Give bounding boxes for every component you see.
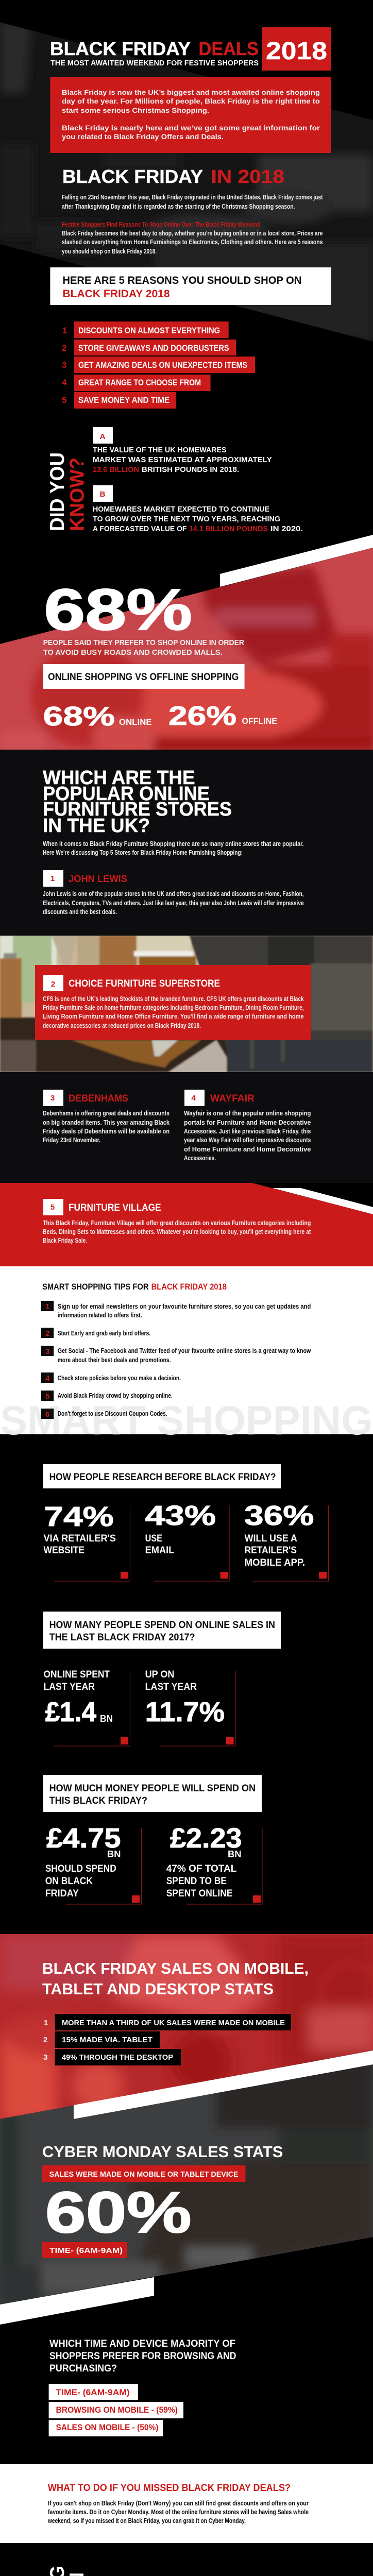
panel: store 5 Furniture Village: Black Friday Sale. (43, 1237, 87, 1244)
tip 4 (41, 1372, 181, 1383)
list: device stats: 15% MADE VIA. TABLET (62, 2036, 152, 2044)
heading box: how people research (43, 1464, 281, 1488)
tip 1: Sign up for email newsletters on your favourite furniture stores, so you can get updates and (58, 1303, 311, 1310)
list: five reasons: 1 (62, 326, 67, 335)
stat card: £4.75 BN: FRIDAY (45, 1888, 79, 1899)
panel: cyber monday dark photo (0, 2050, 373, 2308)
store 2: Choice Furniture Superstore: decorative accessories at reduced prices on Black Friday 2018. (43, 1022, 201, 1029)
list: five reasons: GET AMAZING DEALS ON UNEXPECTED ITEMS (78, 360, 247, 370)
store 2: Choice Furniture Superstore: CHOICE FURNITURE SUPERSTORE (69, 978, 220, 989)
list: device stats: 2 (43, 2036, 47, 2044)
list: preference labels (49, 2384, 183, 2436)
panel: missed deals (0, 2464, 373, 2543)
stat card: 36%: 36% (244, 1500, 314, 1531)
stat card: £2.23 BN: 47% OF TOTAL (166, 1863, 237, 1874)
text block: stores intro (43, 840, 304, 856)
subtitle: THE MOST AWAITED WEEKEND FOR FESTIVE SHOPPERS (50, 59, 259, 67)
decorative white strip lower (0, 2277, 154, 2325)
list: five reasons: SAVE MONEY AND TIME (78, 395, 169, 405)
fact B: HOMEWARES MARKET EXPECTED TO CONTINUE (93, 505, 269, 514)
panel: reasons heading: BLACK FRIDAY 2018 (62, 288, 170, 300)
stat card: 11.7%: UP ON (145, 1669, 174, 1680)
tip 1: 1 (45, 1302, 49, 1311)
panel: online shopping red photo (0, 541, 373, 757)
tip 3 (41, 1346, 311, 1364)
panel: reasons heading: HERE ARE 5 REASONS YOU SHOULD SHOP ON (62, 275, 301, 286)
stat card: 43%: USE (145, 1533, 162, 1544)
store 2: Choice Furniture Superstore: Living Room Furniture and Home Office Furniture. You'll find a wide range of furniture and home (43, 1013, 304, 1020)
stat: online 68%: ONLINE (119, 717, 152, 727)
list: five reasons: 2 (62, 343, 66, 353)
fact A: THE VALUE OF THE UK HOMEWARES (93, 446, 227, 454)
heading: Black Friday in 2018 (62, 166, 284, 187)
heading: Black Friday in 2018: BLACK FRIDAY (62, 166, 203, 187)
stat: online 68% (43, 702, 152, 732)
tip 3: more about their best deals and promotions. (58, 1357, 171, 1364)
store 4: Wayfair (184, 1090, 311, 1162)
tip 1: information related to offers first. (58, 1312, 142, 1319)
store 3: Debenhams: DEBENHAMS (69, 1093, 128, 1104)
fact B: IN 2020. (270, 524, 303, 533)
heading: mobile sales (42, 1959, 309, 1998)
store 1: John Lewis (43, 870, 304, 916)
store 1: John Lewis: discounts and the best deals. (43, 908, 117, 916)
stat card: £4.75 BN: ON BLACK (45, 1876, 93, 1887)
store 4: Wayfair: Wayfair is one of the popular online shopping (184, 1110, 311, 1117)
heading box: how much money: THIS BLACK FRIDAY? (49, 1795, 147, 1806)
tip 2 (41, 1328, 150, 1338)
panel: reasons heading (50, 267, 331, 305)
panel: online vs offline heading: ONLINE SHOPPING VS OFFLINE SHOPPING (48, 672, 239, 683)
year badge: 2018 (266, 38, 327, 65)
fact B: B (100, 490, 106, 499)
text block: stores intro: Here We're discussing Top 5 Stores for Black Friday Home Furnishing Shopping: (43, 849, 243, 856)
heading: popular stores: FURNITURE STORES (43, 799, 232, 820)
store 2: Choice Furniture Superstore: Friday Furniture Sale on home furniture categories including Bedroom Furniture, Dining Room Furniture, (43, 1004, 304, 1011)
panel: mobile sales red photo (0, 1934, 373, 2125)
heading box: how many people spend: HOW MANY PEOPLE SPEND ON ONLINE SALES IN (49, 1620, 275, 1631)
panel: store 5 Furniture Village: Beds, Dining Sets to Mattresses and others. Whatever you're looking to buy, you'll get everything here at (43, 1228, 311, 1235)
stat card: 74%: 74% (44, 1501, 114, 1532)
label bar: time (42, 2242, 127, 2258)
heading: did you know, vertical: DID YOU (46, 452, 69, 531)
fact B: TO GROW OVER THE NEXT TWO YEARS, REACHING (93, 515, 280, 523)
panel: store 5 Furniture Village: FURNITURE VILLAGE (69, 1202, 161, 1213)
list: preference labels: TIME- (6AM-9AM) (56, 2387, 130, 2397)
stat card: 36%: MOBILE APP. (245, 1557, 305, 1568)
watermark: smart shopping: SMART SHOPPING (0, 1397, 373, 1443)
heading box: how much money: HOW MUCH MONEY PEOPLE WILL SPEND ON (49, 1783, 256, 1794)
stat card: 36%: RETAILER'S (245, 1545, 297, 1556)
store 4: Wayfair: year also Way Fair will offer impressive discounts (184, 1137, 311, 1144)
text block: about Black Friday: Black Friday becomes the best day to shop, whether you're buying online or in a local store, Prices are (62, 230, 323, 237)
stat card: 36% (244, 1500, 329, 1581)
heading box: how people research: HOW PEOPLE RESEARCH BEFORE BLACK FRIDAY? (49, 1472, 276, 1483)
list: five reasons: GREAT RANGE TO CHOOSE FROM (78, 378, 201, 387)
store 3: Debenhams (43, 1090, 169, 1144)
stat: 68%: 68% (44, 577, 192, 642)
panel: intro: day of the year. For Millions of people, Black Friday is the right time to (62, 97, 320, 105)
panel: missed deals: favourite items. Do it on Cyber Monday. Most of the online furniture stores will be having Sales whole (48, 2509, 309, 2516)
tip 3: Get Social - The Facebook and Twitter feed of your favourite online stores is a great way to know (58, 1347, 311, 1354)
heading: which time and device (49, 2338, 236, 2374)
decorative white strips (74, 2050, 373, 2119)
decorative white strip (220, 535, 373, 587)
text block: about Black Friday: slashed on everything from Home Furnishings to Electronics, Clothing and others. Here are 5 reasons (62, 239, 323, 246)
fact B: 14.1 BILLION POUNDS (189, 524, 268, 533)
heading: did you know, vertical (46, 452, 89, 531)
list: device stats: 1 (44, 2019, 48, 2027)
store 3: Debenhams: Friday deals of Debenhams will be available on (43, 1128, 169, 1135)
title: DEALS (199, 38, 259, 59)
stat card: £2.23 BN: £2.23 (170, 1823, 242, 1854)
stat card: 74% (43, 1501, 130, 1581)
list: preference labels: BROWSING ON MOBILE - (59%) (56, 2405, 178, 2415)
store 2: Choice Furniture Superstore (35, 965, 311, 1040)
store 2: Choice Furniture Superstore: CFS is one of the UK's leading Stockists of the branded furniture. CFS UK offers great discounts at Black (43, 995, 304, 1003)
stat card: 74%: VIA RETAILER'S (43, 1533, 116, 1544)
label bar: time: TIME- (6AM-9AM) (49, 2246, 123, 2255)
store 4: Wayfair: Accessories. (184, 1155, 216, 1162)
stat card: 43% (145, 1500, 229, 1581)
heading box: how many people spend: THE LAST BLACK FRIDAY 2017? (49, 1632, 195, 1643)
heading: popular stores: IN THE UK? (43, 815, 150, 837)
tip 5: Avoid Black Friday crowd by shopping online. (58, 1392, 173, 1399)
store 3: Debenhams: Friday 23rd November. (43, 1137, 100, 1144)
stat card: 43%: EMAIL (145, 1545, 175, 1556)
store 2: Choice Furniture Superstore: 2 (51, 980, 55, 989)
heading: popular stores: POPULAR ONLINE (43, 783, 210, 805)
stat card: £4.75 BN: BN (107, 1849, 121, 1859)
tip 3: 3 (45, 1347, 49, 1356)
store 4: Wayfair: WAYFAIR (210, 1093, 255, 1104)
fact A: BRITISH POUNDS IN 2018. (142, 465, 239, 474)
panel: intro (50, 77, 331, 153)
stat card: 11.7%: LAST YEAR (145, 1682, 197, 1692)
heading box: how many people spend (43, 1612, 281, 1649)
label bar: mobile or tablet: SALES WERE MADE ON MOBILE OR TABLET DEVICE (49, 2170, 239, 2179)
store 1: John Lewis: Electricals, Computers, TVs and others. Just like last year, this year also John Lewis will offer impressive (43, 900, 304, 907)
tip 5: 5 (45, 1392, 49, 1401)
year badge (262, 27, 331, 71)
list: five reasons: 3 (62, 360, 66, 370)
list: preference labels: SALES ON MOBILE - (50%) (56, 2422, 159, 2432)
text block: stores intro: When it comes to Black Friday Furniture Shopping there are so many online stores that are popular. (43, 840, 304, 848)
panel: store 5 Furniture Village (0, 1183, 373, 1266)
text block: prefer online: PEOPLE SAID THEY PREFER TO SHOP ONLINE IN ORDER (43, 638, 244, 647)
panel: store 5 Furniture Village: 5 (50, 1203, 55, 1212)
stat card: £2.23 BN (166, 1823, 262, 1904)
fact A (93, 427, 272, 474)
stat card: £4.75 BN (45, 1823, 142, 1904)
panel: intro: Black Friday is nearly here and we’ve got some great information for (62, 124, 320, 132)
stat card: 74%: WEBSITE (43, 1545, 84, 1556)
stat card: £4.75 BN: SHOULD SPEND (45, 1863, 116, 1874)
panel: intro: start some serious Christmas Shopping. (62, 106, 209, 114)
store 1: John Lewis: John Lewis is one of the popular stores in the UK and offers great deals and discounts on Home, Fashion, (43, 890, 304, 897)
stat: offline 26% (168, 701, 277, 731)
stat card: 11.7%: 11.7% (145, 1697, 225, 1727)
list: five reasons: STORE GIVEAWAYS AND DOORBUSTERS (78, 343, 229, 353)
stat card: £1.4 BN: £1.4 (45, 1697, 96, 1727)
heading: Black Friday in 2018: IN 2018 (211, 166, 284, 187)
stat card: 36%: WILL USE A (245, 1533, 297, 1544)
panel: intro: Black Friday is now the UK’s biggest and most awaited online shopping (62, 88, 320, 96)
tip 4: 4 (45, 1374, 50, 1383)
text block: prefer online (43, 638, 244, 657)
list: device stats (43, 2014, 291, 2065)
tip 2: 2 (45, 1329, 49, 1338)
panel: bedroom photo band (0, 936, 373, 1072)
store 4: Wayfair: 4 (191, 1094, 196, 1103)
stat card: £1.4 BN (43, 1669, 130, 1746)
heading: did you know, vertical: KNOW? (66, 457, 89, 531)
heading box: how much money (43, 1775, 262, 1812)
stat: offline 26%: OFFLINE (242, 716, 277, 726)
store 1: John Lewis: JOHN LEWIS (69, 874, 127, 885)
stat card: £4.75 BN: £4.75 (46, 1823, 121, 1854)
title (50, 38, 259, 59)
heading: smart shopping tips (42, 1282, 227, 1292)
text block: prefer online: TO AVOID BUSY ROADS AND CROWDED MALLS. (43, 648, 223, 657)
fact B (93, 485, 303, 533)
store 1: John Lewis: 1 (50, 874, 55, 883)
stat card: 11.7% (145, 1669, 235, 1746)
store 3: Debenhams: Debenhams is offering great deals and discounts (43, 1110, 169, 1117)
panel: store 5 Furniture Village: This Black Friday, Furniture Village will offer great discounts on various Furniture categories including (43, 1219, 311, 1227)
stat card: £2.23 BN: SPEND TO BE (166, 1876, 227, 1887)
heading: smart shopping tips: BLACK FRIDAY 2018 (151, 1282, 227, 1292)
heading: mobile sales: TABLET AND DESKTOP STATS (42, 1980, 274, 1998)
panel: online vs offline heading (43, 664, 245, 689)
heading: which time and device: PURCHASING? (49, 2363, 117, 2374)
stat card: £1.4 BN: ONLINE SPENT (43, 1669, 110, 1680)
heading: cyber monday: CYBER MONDAY SALES STATS (42, 2143, 283, 2161)
tip 4: Check store policies before you make a decision. (58, 1375, 181, 1382)
heading: mobile sales: BLACK FRIDAY SALES ON MOBILE, (42, 1959, 309, 1977)
stat: online 68%: 68% (43, 702, 115, 732)
store 3: Debenhams: 3 (50, 1094, 55, 1103)
tip 6 (41, 1409, 167, 1419)
stat card: £2.23 BN: SPENT ONLINE (166, 1888, 233, 1899)
text block: about Black Friday (62, 194, 323, 255)
panel: intro: you related to Black Friday Offers and Deals. (62, 132, 224, 141)
stat card: 43%: 43% (145, 1500, 216, 1531)
panel: furniture stores background (0, 750, 373, 1183)
heading: looking for even more deals, vertical (46, 2566, 128, 2576)
text block: about Black Friday: Festive Shoppers Find Reasons To Shop Online Over The Black Friday Weekend (62, 221, 261, 228)
list: device stats: MORE THAN A THIRD OF UK SALES WERE MADE ON MOBILE (62, 2019, 285, 2027)
fact A: 13.6 BILLION (93, 465, 139, 474)
stat card: £2.23 BN: BN (228, 1849, 242, 1859)
store 4: Wayfair: Accessories. Just like previous Black Friday, this (184, 1128, 311, 1135)
tip 2: Start Early and grab early bird offers. (58, 1330, 150, 1337)
list: five reasons: 5 (62, 395, 66, 405)
stat card: £1.4 BN: BN (100, 1714, 113, 1724)
label bar: mobile or tablet (42, 2165, 245, 2182)
tip 6: Don't forget to use Discount Coupon Codes. (58, 1410, 167, 1417)
panel: smart shopping tips (0, 1266, 373, 1434)
list: device stats: 49% THROUGH THE DESKTOP (62, 2053, 173, 2062)
panel: missed deals: weekend, so if you missed it on Black Friday, you can grab it on Cyber Monday. (47, 2517, 246, 2524)
decorative white strip (273, 1188, 373, 1214)
title: BLACK FRIDAY (50, 38, 191, 59)
text block: about Black Friday: you should shop on Black Friday 2018. (62, 248, 157, 255)
panel: hero bedroom photo (0, 22, 373, 342)
fact A: MARKET WAS ESTIMATED AT APPROXIMATELY (93, 455, 272, 464)
text block: about Black Friday: after Thanksgiving Day and it is regarded as the starting of the Christmas Shopping season. (62, 203, 295, 210)
store 3: Debenhams: on big branded items. This year amazing Black (43, 1119, 169, 1126)
heading: popular stores (43, 767, 232, 837)
heading: which time and device: SHOPPERS PREFER FOR BROWSING AND (49, 2351, 236, 2362)
heading: popular stores: WHICH ARE THE (43, 767, 195, 789)
stat: 60%: 60% (45, 2180, 192, 2245)
stat card: £1.4 BN: LAST YEAR (43, 1682, 95, 1692)
heading: which time and device: WHICH TIME AND DEVICE MAJORITY OF (49, 2338, 235, 2349)
fact B: A FORECASTED VALUE OF (93, 524, 186, 533)
store 4: Wayfair: of Home Furniture and Home Decorative (184, 1146, 311, 1153)
list: five reasons: 4 (62, 378, 67, 387)
heading: smart shopping tips: SMART SHOPPING TIPS FOR (42, 1282, 148, 1292)
panel: missed deals: WHAT TO DO IF YOU MISSED BLACK FRIDAY DEALS? (48, 2483, 291, 2494)
panel: missed deals: If you can't shop on Black Friday (Don't Worry) you can still find great discounts and offers on your (48, 2500, 309, 2507)
store 4: Wayfair: portals for Furniture and Home Decorative (184, 1119, 311, 1126)
fact A: A (100, 432, 106, 441)
tip 6: 6 (45, 1410, 49, 1419)
tip 5 (41, 1391, 173, 1401)
stat: offline 26%: 26% (168, 701, 236, 731)
list: five reasons (62, 321, 255, 409)
list: five reasons: DISCOUNTS ON ALMOST EVERYTHING (78, 326, 220, 335)
list: device stats: 3 (43, 2053, 47, 2062)
tip 1 (41, 1301, 311, 1319)
